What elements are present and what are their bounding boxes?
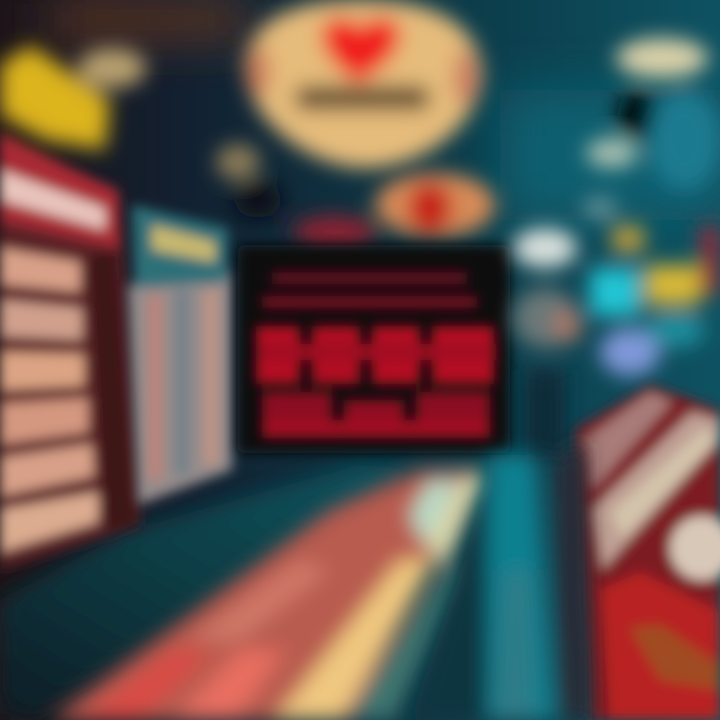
aisle floor [50, 470, 488, 720]
shelf rows [0, 248, 98, 552]
face balloon [245, 0, 482, 168]
right shelf / cart [575, 385, 720, 720]
shelf upright [88, 250, 136, 530]
right clouds and icons [513, 38, 720, 460]
shelf header sign [0, 135, 118, 248]
central sign [238, 245, 510, 453]
sign board [238, 245, 510, 453]
teal right aisle strip [410, 440, 590, 720]
left floor [0, 465, 420, 720]
left shelf [0, 130, 140, 570]
small figures [216, 144, 495, 248]
centre-left shelf [128, 205, 232, 505]
heart nose [322, 18, 400, 82]
sign text rendered as blurred blocks [256, 272, 496, 438]
yellow corner shape [0, 45, 146, 150]
mouth [295, 86, 430, 110]
